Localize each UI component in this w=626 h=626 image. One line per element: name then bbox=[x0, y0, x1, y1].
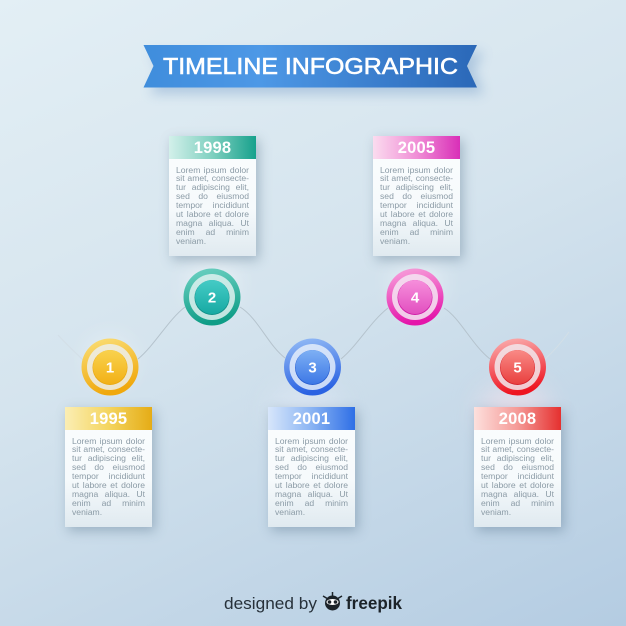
text block bbox=[275, 436, 348, 517]
heading: 2001: 2001 bbox=[293, 410, 330, 428]
text block bbox=[72, 436, 145, 517]
marker 4: 4 bbox=[411, 290, 420, 306]
text block: veniam. bbox=[481, 507, 511, 517]
marker 5 bbox=[489, 338, 546, 396]
text block: magna aliqua. Ut bbox=[176, 218, 249, 228]
text block: magna aliqua. Ut bbox=[481, 489, 554, 499]
text block: tur adipiscing elit, bbox=[481, 453, 554, 463]
text block: sit amet, consecte- bbox=[275, 444, 348, 454]
card: 2008 bbox=[474, 407, 561, 527]
text block: tempor incididunt bbox=[72, 471, 145, 481]
text block: ut labore et dolore bbox=[481, 480, 554, 490]
text block: tempor incididunt bbox=[481, 471, 554, 481]
text block: sed do eiusmod bbox=[275, 462, 348, 472]
text block: sed do eiusmod bbox=[72, 462, 145, 472]
marker 5: 5 bbox=[513, 360, 522, 376]
heading: 1995: 1995 bbox=[90, 410, 127, 428]
marker 1 bbox=[82, 338, 138, 396]
text block: Lorem ipsum dolor bbox=[275, 436, 348, 446]
text block: enim ad minim bbox=[481, 498, 554, 508]
heading: 2005 bbox=[373, 136, 460, 159]
marker 2 bbox=[184, 268, 240, 326]
text block: ut labore et dolore bbox=[72, 480, 145, 490]
text block: tempor incididunt bbox=[380, 200, 453, 210]
text block: enim ad minim bbox=[380, 227, 453, 237]
text block: veniam. bbox=[380, 236, 410, 246]
text block: Lorem ipsum dolor bbox=[380, 164, 453, 174]
heading: 2008: 2008 bbox=[499, 410, 536, 428]
icon: freepik logo bbox=[323, 592, 342, 610]
text block: Lorem ipsum dolor bbox=[72, 436, 145, 446]
heading: 1998 bbox=[169, 136, 256, 159]
text block: sed do eiusmod bbox=[176, 191, 249, 201]
marker 1: 1 bbox=[106, 360, 114, 376]
marker 3 bbox=[284, 338, 341, 396]
text block: Lorem ipsum dolor bbox=[176, 164, 249, 174]
heading: 2005: 2005 bbox=[398, 139, 435, 157]
text block: enim ad minim bbox=[72, 498, 145, 508]
text block: enim ad minim bbox=[275, 498, 348, 508]
text block: sit amet, consecte- bbox=[176, 173, 249, 183]
text block: sit amet, consecte- bbox=[481, 444, 554, 454]
card: 2005 bbox=[373, 136, 460, 256]
text block: tempor incididunt bbox=[275, 471, 348, 481]
card: 1998 bbox=[169, 136, 256, 256]
title ribbon bbox=[144, 45, 484, 94]
text block: ut labore et dolore bbox=[275, 480, 348, 490]
text block: ut labore et dolore bbox=[380, 209, 453, 219]
text block: magna aliqua. Ut bbox=[275, 489, 348, 499]
text block: sed do eiusmod bbox=[481, 462, 554, 472]
card: 2001 bbox=[268, 407, 355, 527]
text block: veniam. bbox=[72, 507, 102, 517]
text block: enim ad minim bbox=[176, 227, 249, 237]
credit: designed by bbox=[224, 595, 318, 613]
marker 2: 2 bbox=[208, 290, 216, 306]
text block: sit amet, consecte- bbox=[72, 444, 145, 454]
text block bbox=[380, 164, 453, 246]
marker 3: 3 bbox=[308, 360, 317, 376]
heading: 1998: 1998 bbox=[194, 139, 231, 157]
text block: sed do eiusmod bbox=[380, 191, 453, 201]
text block: magna aliqua. Ut bbox=[72, 489, 145, 499]
text block: ut labore et dolore bbox=[176, 209, 249, 219]
heading: 2001 bbox=[268, 407, 355, 430]
text block: tur adipiscing elit, bbox=[380, 182, 453, 192]
text block: sit amet, consecte- bbox=[380, 173, 453, 183]
text block: veniam. bbox=[176, 236, 206, 246]
text block: veniam. bbox=[275, 507, 305, 517]
title: TIMELINE INFOGRAPHIC bbox=[163, 53, 458, 79]
marker 4 bbox=[386, 268, 444, 326]
text block bbox=[176, 164, 249, 246]
text block: tur adipiscing elit, bbox=[275, 453, 348, 463]
text block: Lorem ipsum dolor bbox=[481, 436, 554, 446]
text block: tur adipiscing elit, bbox=[176, 182, 249, 192]
text block: tur adipiscing elit, bbox=[72, 453, 145, 463]
heading: 2008 bbox=[474, 407, 561, 430]
text block: tempor incididunt bbox=[176, 200, 249, 210]
text block bbox=[481, 436, 554, 517]
card: 1995 bbox=[65, 407, 152, 527]
heading: 1995 bbox=[65, 407, 152, 430]
credit: freepik bbox=[346, 593, 402, 613]
credit bbox=[224, 592, 402, 613]
text block: magna aliqua. Ut bbox=[380, 218, 453, 228]
